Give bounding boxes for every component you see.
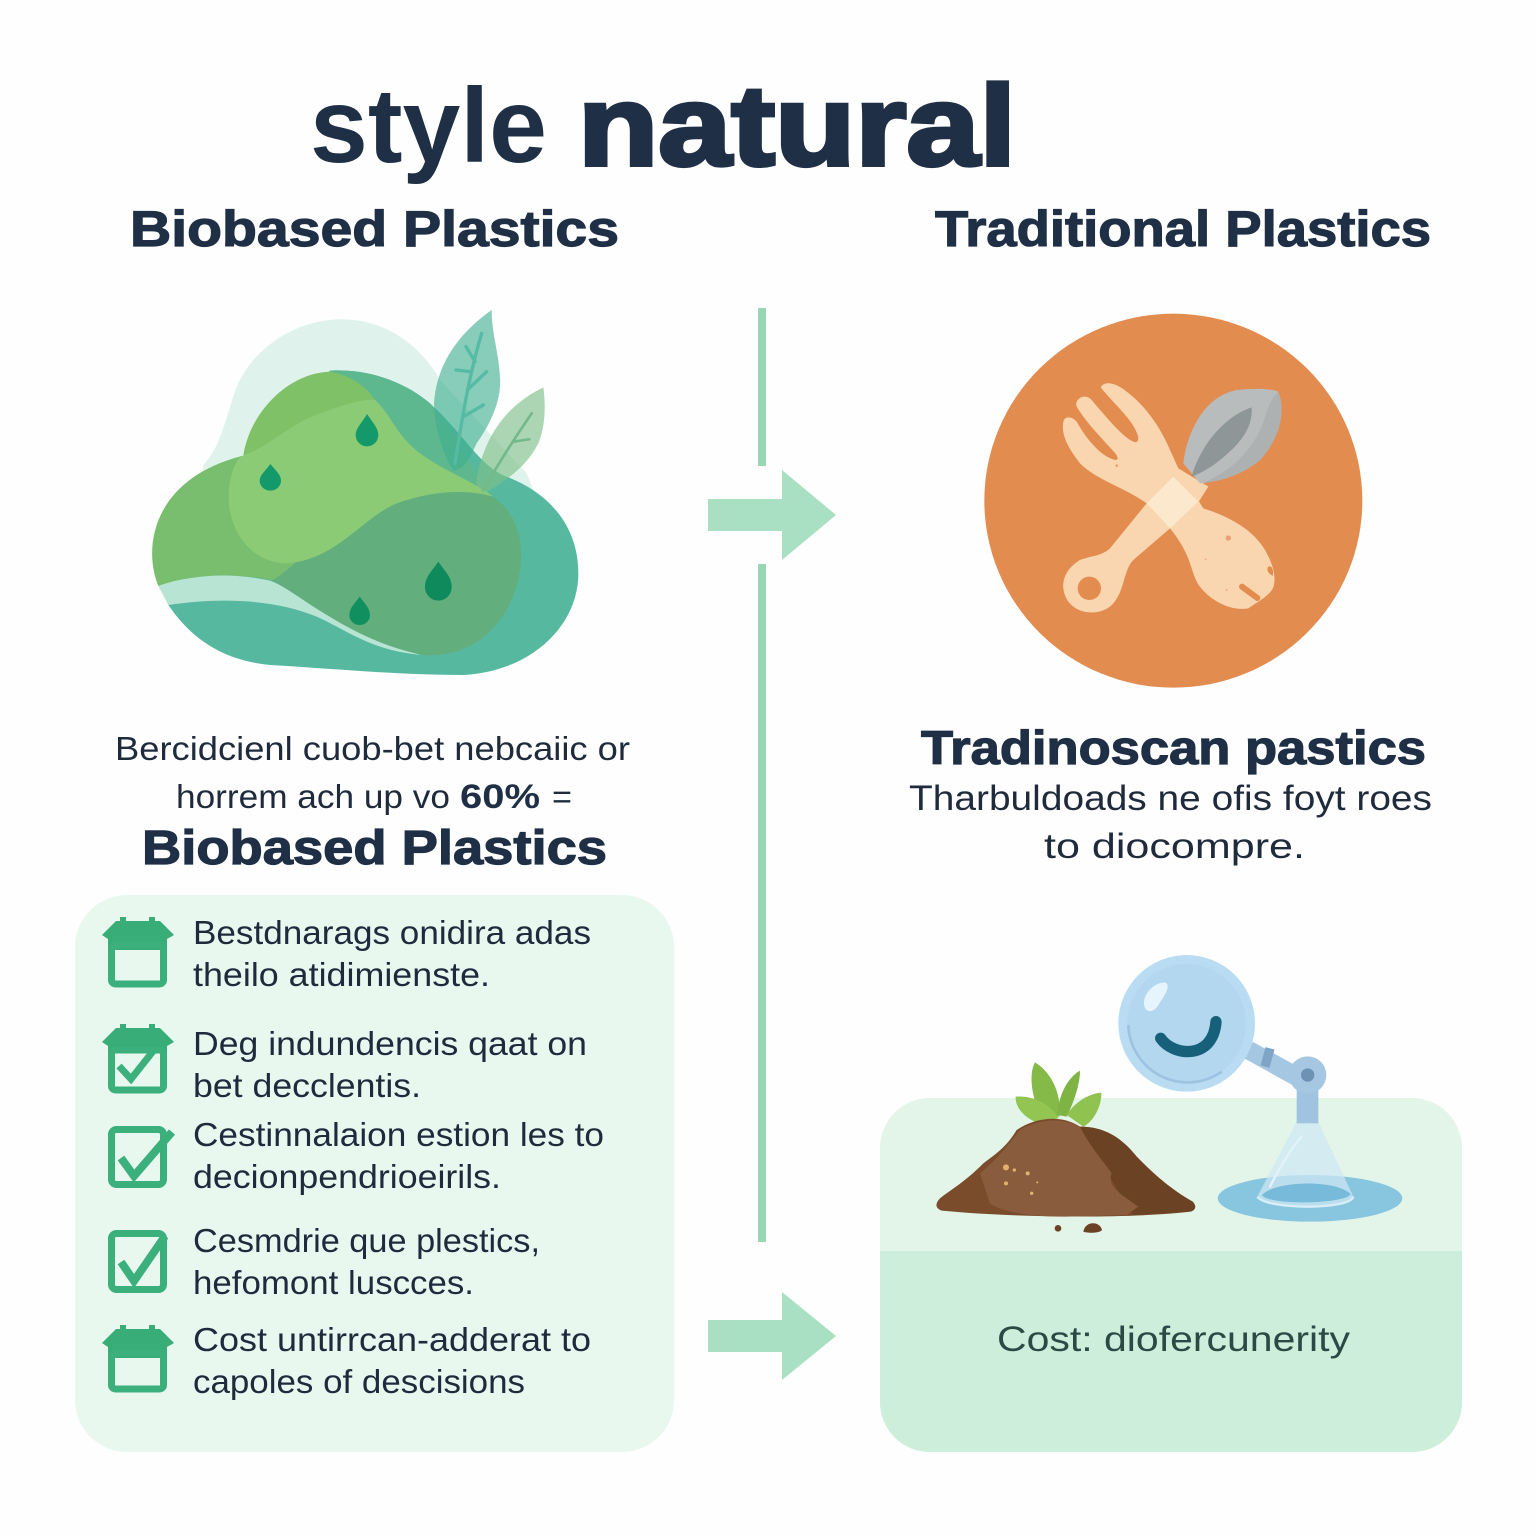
cost label: Cost: diofercunerity bbox=[997, 1320, 1351, 1359]
text block: biobased description: Bercidcienl cuob-bet nebcaiic or bbox=[115, 730, 630, 767]
heading: biobased plastics: Biobased Plastics bbox=[130, 201, 619, 257]
leaf: small bbox=[476, 387, 545, 494]
lens bbox=[1118, 955, 1255, 1092]
fork bbox=[1063, 383, 1274, 609]
item 5: capoles of descisions bbox=[193, 1363, 525, 1400]
item 1: theilo atidimienste. bbox=[193, 956, 490, 993]
panel: biobased checklist bbox=[75, 895, 674, 1452]
panel: decomposition and cost bbox=[880, 1098, 1462, 1452]
spoon head bbox=[1170, 389, 1282, 505]
puddle bbox=[1218, 1175, 1402, 1222]
text block: traditional description bbox=[909, 721, 1432, 866]
icon: checkbox bbox=[112, 1130, 172, 1184]
text block: biobased description: horrem ach up vo bbox=[176, 778, 450, 815]
illustration: biobased organic blob with leaves bbox=[152, 310, 578, 675]
icon: calendar bbox=[102, 1325, 174, 1389]
handle with ring bbox=[1063, 503, 1170, 612]
sprout bbox=[1016, 1062, 1101, 1127]
title: natural bbox=[578, 63, 1016, 190]
item 4 bbox=[112, 1222, 540, 1301]
arrow: top bbox=[708, 470, 836, 560]
arrow: bottom bbox=[708, 1292, 836, 1380]
text block: biobased description: Biobased Plastics bbox=[142, 822, 607, 875]
item 5 bbox=[102, 1321, 591, 1400]
item 3 bbox=[112, 1116, 604, 1195]
item 3: Cestinnalaion estion les to bbox=[193, 1116, 604, 1153]
illustration: crossed fork and spoon on orange circle bbox=[984, 314, 1362, 688]
soil bbox=[936, 1119, 1195, 1233]
illustration: magnifier over flask in water bbox=[1118, 955, 1402, 1222]
text block: biobased description bbox=[115, 730, 630, 875]
flask bbox=[1257, 1122, 1353, 1207]
item 4: hefomont luscces. bbox=[193, 1264, 474, 1301]
text block: traditional description: Tharbuldoads ne ofis foyt roes bbox=[909, 779, 1432, 818]
item 3: decionpendrioeirils. bbox=[193, 1158, 501, 1195]
title bbox=[310, 63, 1016, 190]
icon: calendar with check bbox=[102, 1024, 174, 1090]
item 1 bbox=[102, 914, 591, 993]
text block: biobased description: 60% bbox=[460, 778, 540, 816]
item 2 bbox=[102, 1024, 587, 1104]
item 2: bet decclentis. bbox=[193, 1067, 421, 1104]
title: style bbox=[310, 67, 547, 185]
item 4: Cesmdrie que plestics, bbox=[193, 1222, 540, 1259]
heading: traditional plastics: Traditional Plastics bbox=[935, 201, 1431, 257]
item 2: Deg indundencis qaat on bbox=[193, 1025, 587, 1062]
icon: calendar bbox=[102, 917, 174, 984]
icon: checkbox bbox=[112, 1234, 165, 1290]
divider line bbox=[758, 308, 766, 1242]
item 5: Cost untirrcan-adderat to bbox=[193, 1321, 591, 1358]
text block: traditional description: Tradinoscan pastics bbox=[921, 721, 1426, 774]
magnifier arm bbox=[1248, 1048, 1326, 1123]
item 1: Bestdnarags onidira adas bbox=[193, 914, 591, 951]
text block: traditional description: to diocompre. bbox=[1044, 827, 1305, 866]
illustration: soil mound with sprout bbox=[936, 1062, 1195, 1233]
water drops bbox=[260, 414, 452, 625]
text block: biobased description: = bbox=[552, 778, 572, 815]
leaf: large bbox=[434, 310, 500, 471]
